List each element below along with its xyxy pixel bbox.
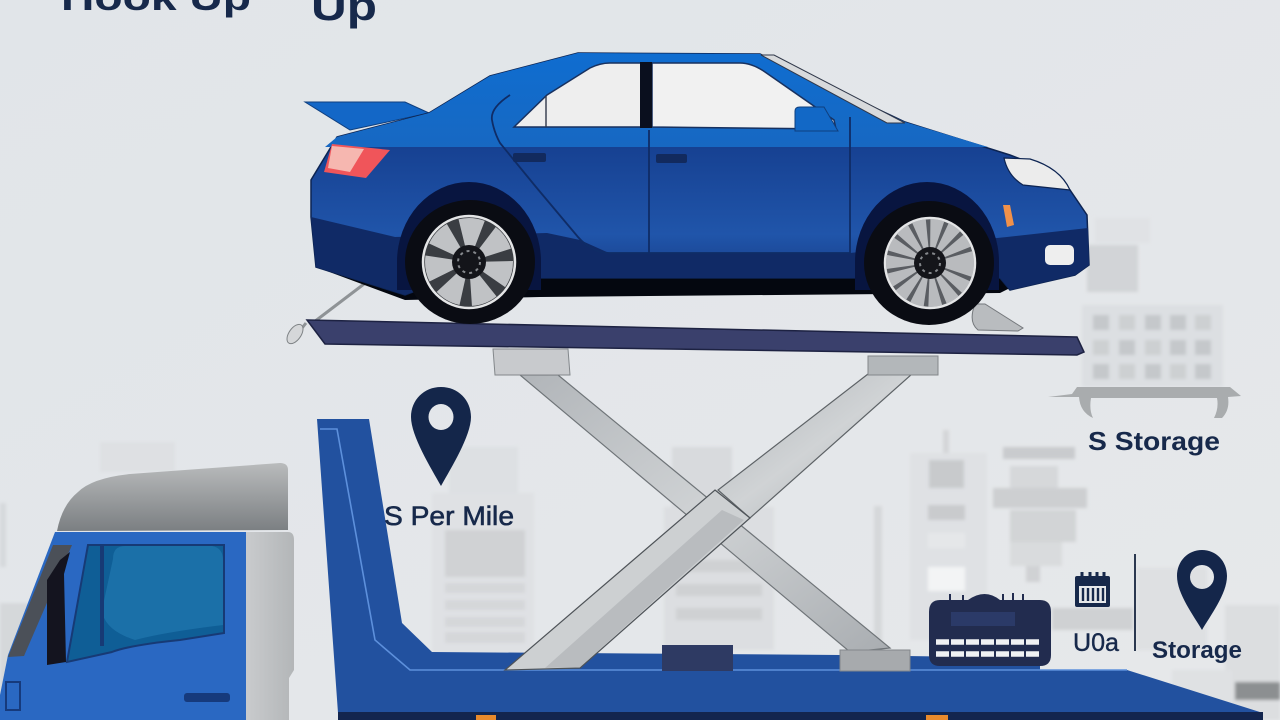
icon: per mile location pin — [411, 387, 471, 486]
windshield — [761, 55, 905, 123]
car body — [311, 53, 1089, 295]
tail light — [476, 715, 496, 720]
door handle — [184, 693, 230, 702]
car — [305, 53, 1089, 325]
icon: device panel — [929, 593, 1051, 666]
label: storage: S Storage — [1088, 426, 1220, 456]
lower left pad — [662, 645, 733, 671]
rear quarter divider — [545, 96, 547, 127]
tow straps and hooks — [284, 284, 1023, 346]
top left pad — [493, 349, 570, 375]
tail light — [324, 144, 390, 178]
window post — [100, 546, 104, 646]
scissor lift — [493, 349, 938, 671]
car underside shadow — [316, 262, 1010, 300]
window glare — [102, 546, 223, 640]
door pillar — [640, 62, 652, 128]
upper body — [325, 53, 988, 147]
icon: storage location pin — [1177, 550, 1227, 630]
mirror — [47, 552, 70, 665]
headlight — [1004, 158, 1070, 190]
cab roof fairing — [57, 463, 288, 531]
side mirror — [795, 107, 838, 131]
cab body — [0, 532, 246, 720]
lower skirt — [311, 217, 1089, 295]
truck flatbed — [317, 419, 1263, 720]
label: U0a: U0a — [1073, 629, 1119, 657]
bed highlight line — [320, 429, 1127, 670]
tail light glare — [328, 146, 364, 172]
indicator — [1003, 205, 1014, 227]
front wheel — [864, 201, 994, 325]
blurred city skyline — [0, 218, 1280, 720]
front door handle — [656, 154, 687, 163]
side window — [67, 545, 224, 662]
platform — [307, 320, 1084, 355]
lower right pad — [840, 650, 910, 671]
rear door handle — [513, 153, 546, 162]
right hook — [972, 304, 1023, 331]
fog lamp — [1045, 245, 1074, 265]
storage bracket icon — [1048, 387, 1241, 418]
top right pad — [868, 356, 938, 375]
rear wheel arch — [397, 182, 541, 290]
rear window — [514, 63, 641, 127]
front window — [652, 63, 836, 129]
label: per mile: S Per Mile — [384, 501, 514, 531]
left hook — [284, 322, 306, 346]
front scissor arm — [505, 374, 912, 670]
label: storage bottom: Storage — [1152, 637, 1242, 664]
spoiler — [305, 102, 429, 130]
door outline — [492, 95, 850, 253]
rear wheel — [405, 200, 535, 324]
windshield — [8, 545, 72, 657]
left strap — [291, 284, 364, 342]
divider line — [1134, 554, 1136, 651]
icon: calendar — [1075, 572, 1110, 607]
truck cab — [0, 463, 294, 720]
bed body — [317, 419, 1263, 713]
marker light — [926, 715, 948, 720]
front wheel arch — [855, 182, 999, 290]
rear scissor arm — [520, 375, 890, 652]
door light — [6, 682, 20, 710]
bed underside — [338, 712, 1263, 720]
side panel — [246, 532, 294, 720]
